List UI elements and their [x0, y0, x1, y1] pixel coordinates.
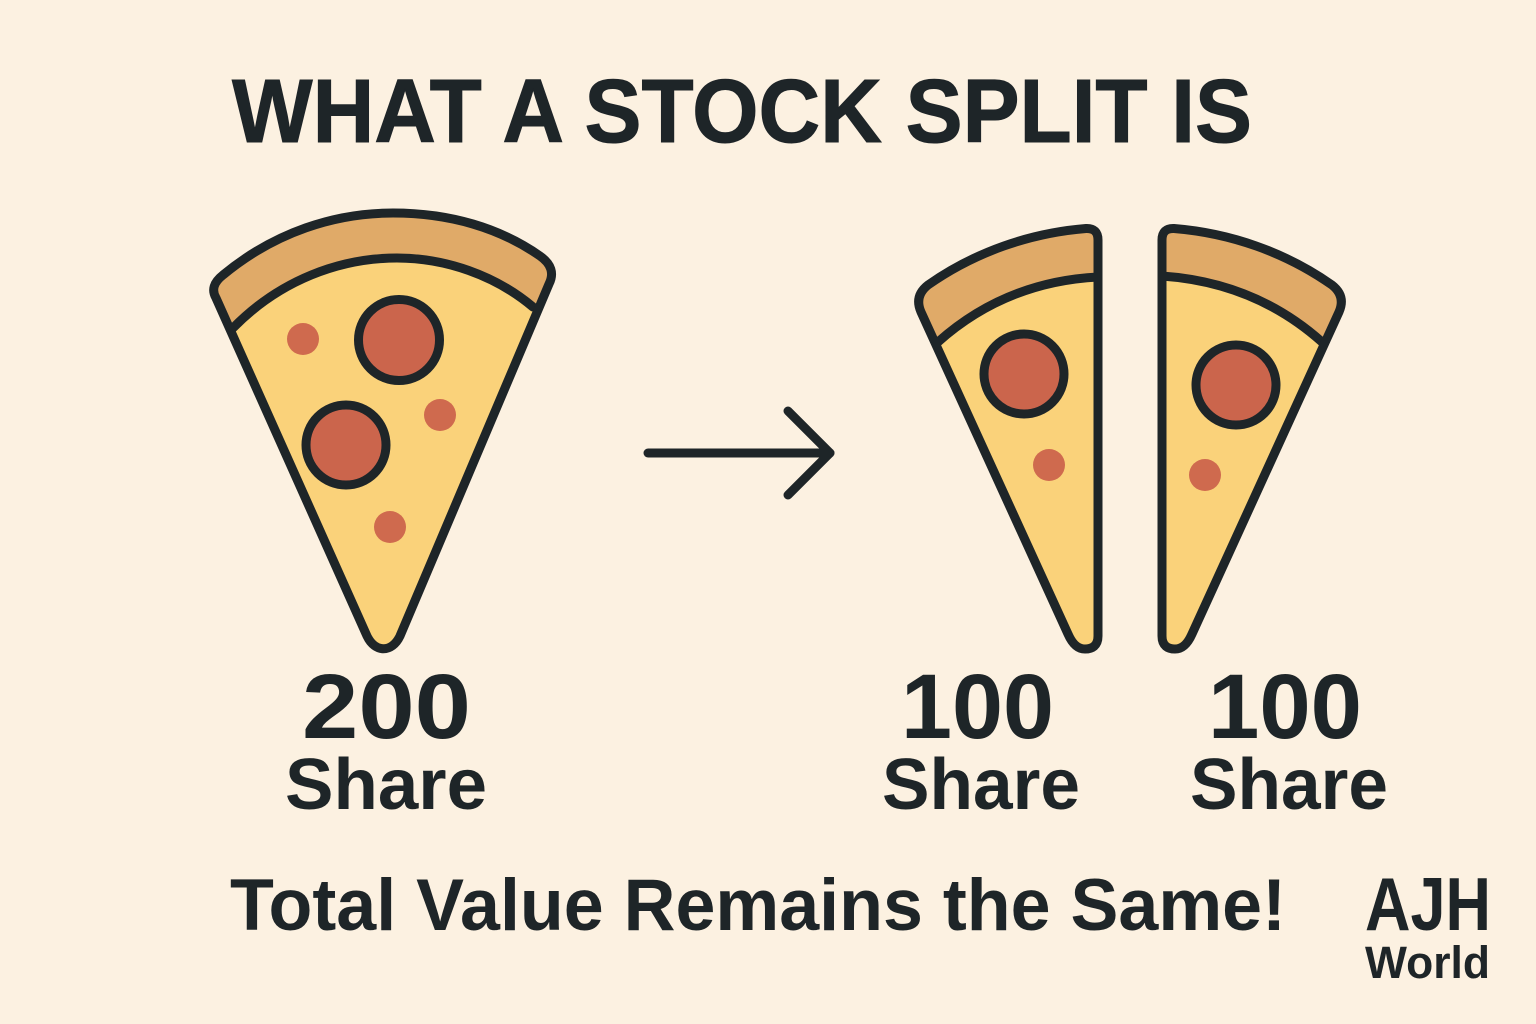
label: right 100 share: 100 [1208, 656, 1362, 758]
large pepperoni [358, 300, 440, 380]
small pepperoni [287, 323, 319, 355]
logo: AJH World: World [1365, 937, 1490, 988]
logo: AJH World [1365, 862, 1491, 988]
label: left 100 share: Share [882, 745, 1080, 825]
icon: right half slice [1162, 228, 1341, 649]
small pepperoni [374, 511, 406, 543]
large pepperoni [306, 405, 386, 485]
label: right 100 share: Share [1190, 745, 1388, 825]
label: 200 share: Share [285, 745, 487, 825]
label: left 100 share [882, 656, 1080, 825]
slice crust [214, 213, 552, 328]
slice cheese [214, 213, 552, 649]
label: 200 share [285, 656, 487, 825]
caption: Total Value Remains the Same! [230, 865, 1286, 946]
arrow [648, 411, 830, 495]
small pepperoni [424, 399, 456, 431]
label: 200 share: 200 [302, 656, 471, 758]
icon: left half slice [919, 228, 1098, 649]
logo: AJH World: AJH [1365, 862, 1491, 946]
title: WHAT A STOCK SPLIT IS [232, 62, 1252, 162]
label: left 100 share: 100 [901, 656, 1054, 758]
icon: whole pizza slice [214, 213, 552, 649]
label: right 100 share [1190, 656, 1388, 825]
